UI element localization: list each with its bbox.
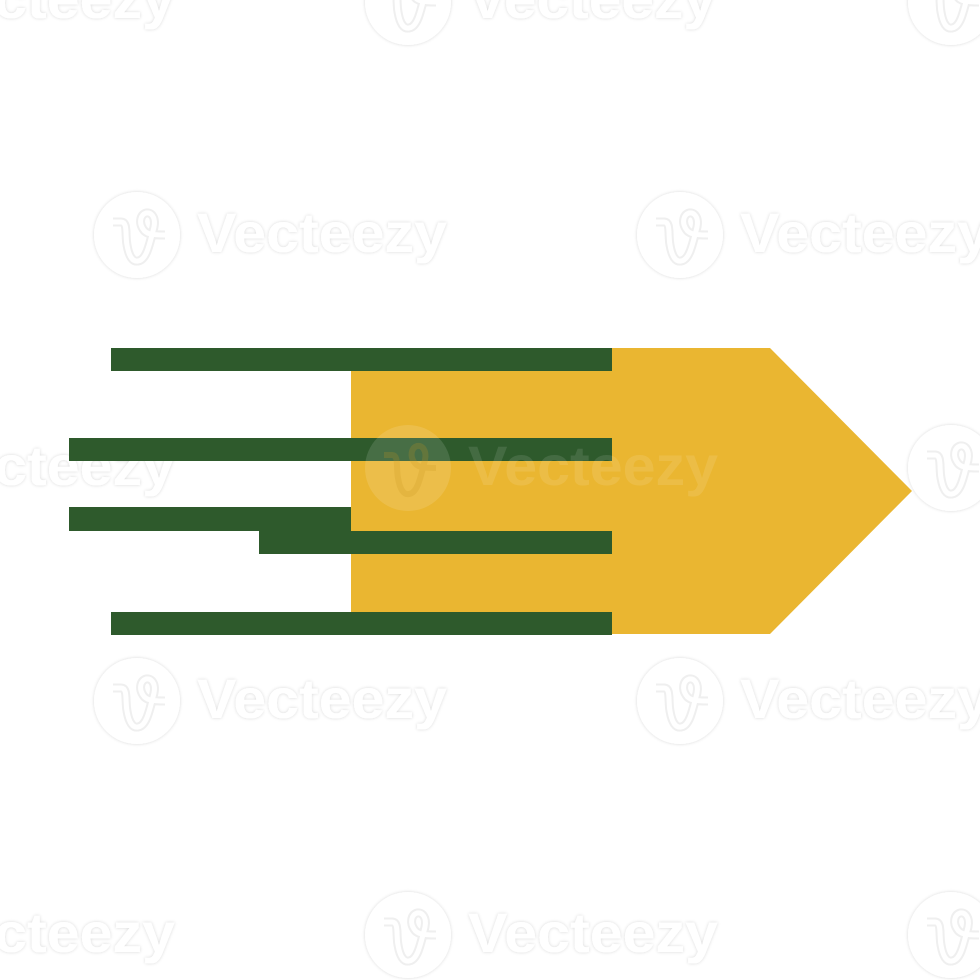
speed lines — [69, 348, 612, 635]
watermark wordmarks: Vecteezy — [740, 201, 980, 264]
watermark over arrow — [365, 425, 718, 511]
watermark wordmarks: Vecteezy — [197, 201, 447, 264]
arrow body — [351, 348, 912, 634]
watermark wordmarks: Vecteezy — [197, 667, 447, 730]
watermark wordmarks: Vecteezy — [468, 901, 718, 964]
watermark over arrow: Vecteezy — [468, 434, 718, 497]
watermark wordmarks: Vecteezy — [740, 667, 980, 730]
